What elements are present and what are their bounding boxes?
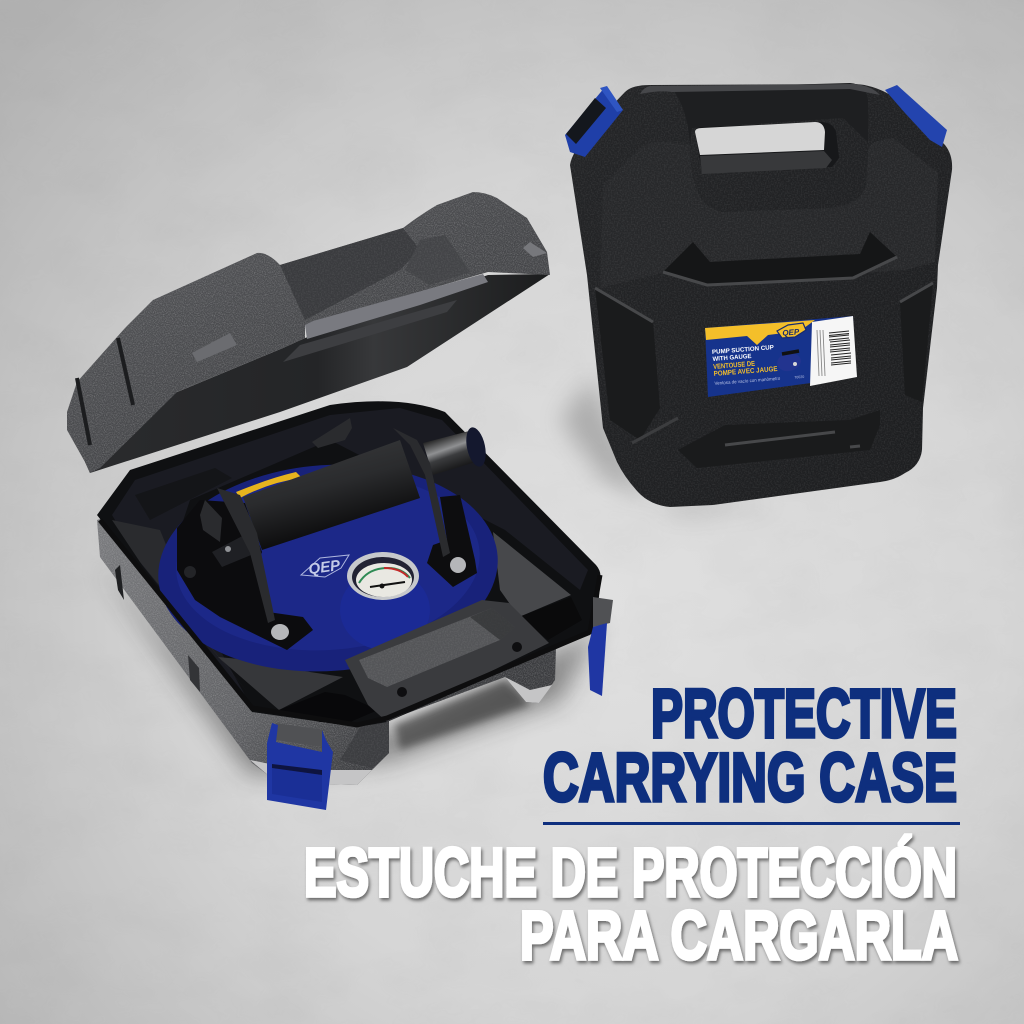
open lid	[67, 192, 550, 473]
QEP logo on disc: QEP	[308, 557, 342, 578]
inner walls	[112, 408, 588, 695]
shadows under cases	[95, 380, 780, 775]
Spanish title	[304, 834, 958, 974]
metal shaft	[423, 430, 482, 475]
label text: PUMP SUCTION CUP	[712, 344, 774, 356]
label text: 70020	[794, 375, 804, 380]
right latch	[588, 597, 613, 696]
case interior	[97, 401, 600, 727]
blue latch left	[565, 86, 623, 157]
label text: WITH GAUGE	[712, 353, 752, 363]
left bracket	[217, 488, 275, 623]
handle slot	[305, 274, 488, 339]
front latch	[267, 723, 333, 810]
suction cup disc	[151, 453, 505, 683]
closed carrying case	[565, 83, 952, 507]
upper ridge	[663, 232, 897, 285]
lid outer shell	[67, 192, 550, 473]
front carry handle tray	[345, 600, 549, 722]
case body	[570, 84, 952, 507]
lower ridge	[632, 410, 880, 468]
lid tab	[523, 242, 547, 257]
barcode	[817, 330, 851, 376]
lower tray	[218, 657, 343, 710]
right foot	[427, 495, 477, 587]
pump body	[177, 500, 313, 650]
right bracket	[393, 428, 450, 557]
lid notch	[192, 333, 237, 362]
case base outer wall	[97, 420, 600, 785]
label product image	[775, 351, 803, 373]
label text: POMPE AVEC JAUGE	[713, 366, 778, 378]
pressure gauge	[347, 552, 419, 600]
tray	[493, 532, 571, 617]
English title	[543, 675, 957, 816]
front rim	[100, 520, 600, 725]
inner lower slope	[112, 520, 250, 695]
grip handle	[243, 440, 420, 550]
QEP label logo: QEP	[782, 327, 800, 338]
lid grooves	[77, 338, 133, 445]
side ridges	[595, 283, 933, 440]
QEP logo on disc	[301, 555, 349, 578]
divider line	[543, 822, 960, 825]
gauge housing	[340, 570, 430, 650]
label text	[712, 342, 804, 386]
lid underside	[85, 274, 550, 473]
open carrying case	[97, 401, 613, 810]
shaft end cap	[463, 426, 489, 468]
fastener bolts	[271, 557, 466, 640]
handle opening	[695, 122, 839, 174]
blue latch right	[885, 85, 947, 147]
handle band	[672, 83, 868, 145]
label text: Ventosa de vacío con manómetro	[714, 376, 781, 386]
product label	[705, 316, 857, 397]
raised panels	[600, 138, 938, 288]
QEP label logo	[777, 323, 806, 338]
inner ledge	[135, 468, 232, 520]
label text: VENTOUSE DE	[713, 361, 756, 371]
